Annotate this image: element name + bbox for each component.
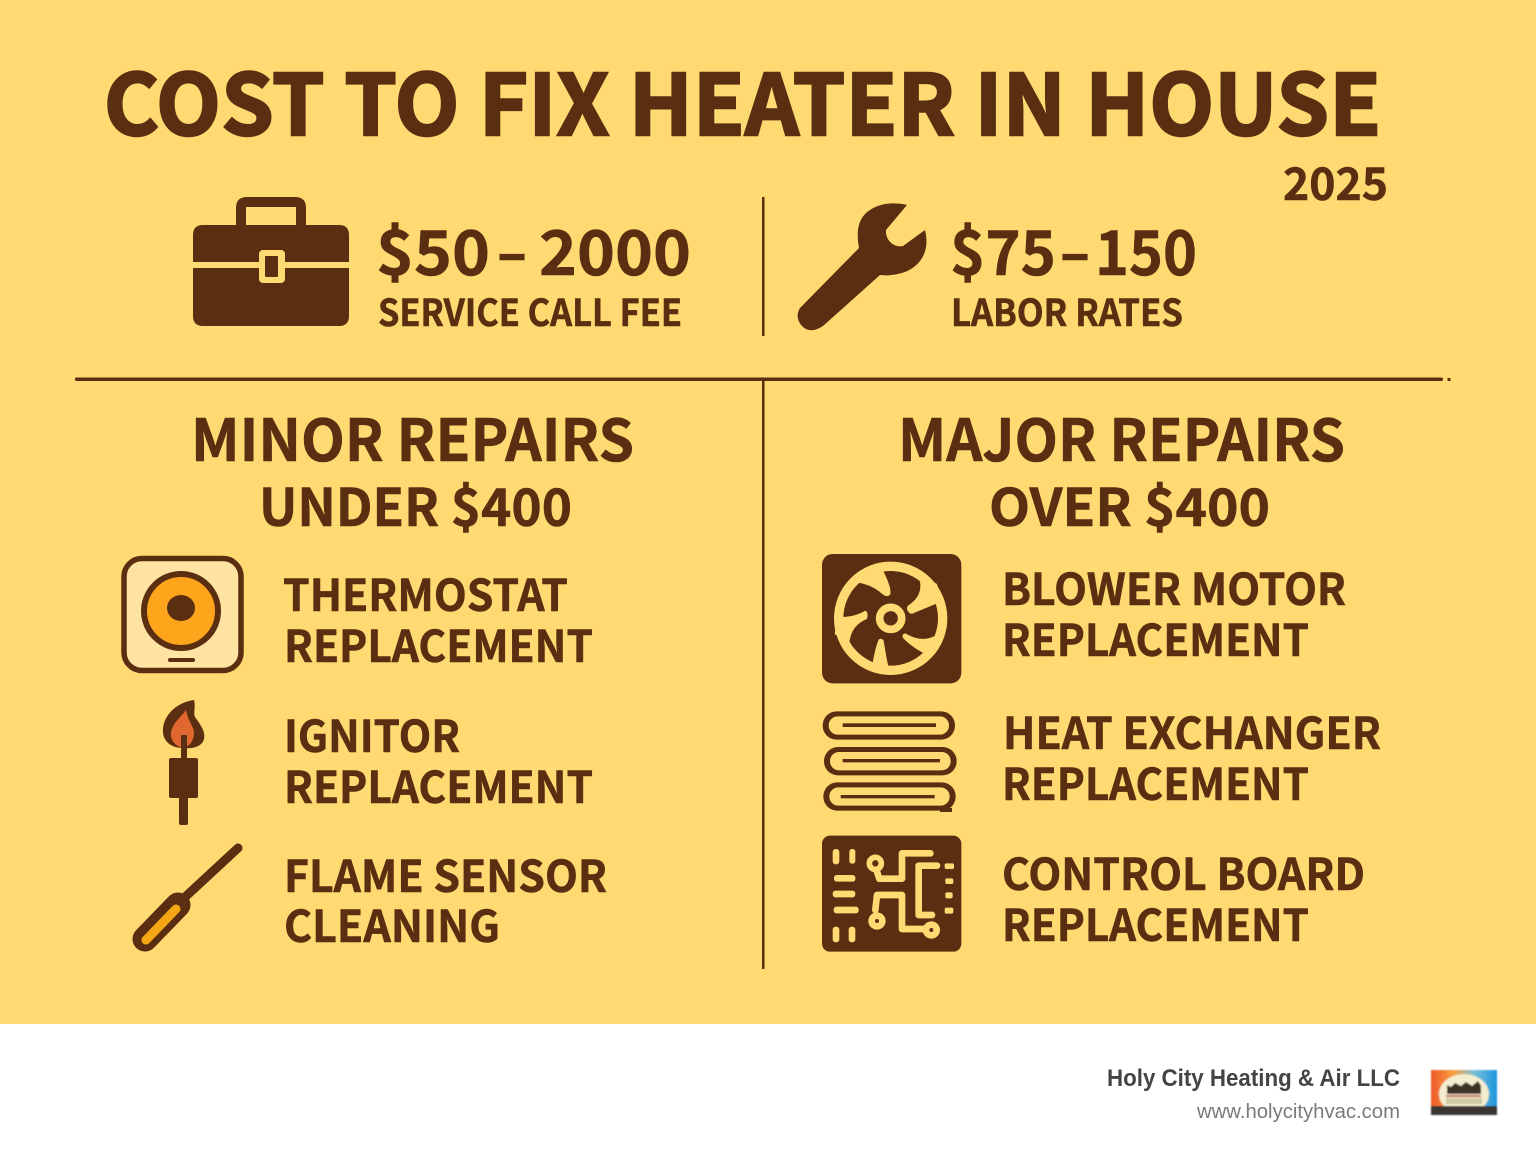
labor label: LABOR RATES	[951, 283, 1183, 337]
major repairs threshold: OVER $400	[989, 466, 1270, 541]
ignitor replacement label: REPLACEMENT	[284, 752, 593, 816]
icon: blower fan	[822, 554, 961, 683]
panel: labor rates	[798, 203, 1197, 337]
icon: ignitor	[163, 700, 204, 825]
icon: company logo	[1431, 1070, 1497, 1115]
service call price: 2000	[539, 203, 691, 293]
board replacement label: REPLACEMENT	[1002, 890, 1309, 954]
blower replacement label: REPLACEMENT	[1002, 605, 1309, 669]
footer company name: Holy City Heating & Air LLC	[1107, 1065, 1400, 1092]
title: COST TO FIX HEATER IN HOUSE	[104, 39, 1381, 160]
service call price: –	[497, 203, 527, 293]
heat exchanger label: HEAT EXCHANGER	[1003, 698, 1381, 762]
flame sensor label: FLAME SENSOR	[284, 841, 607, 905]
icon: thermostat	[124, 558, 241, 670]
panel: minor repairs	[124, 394, 634, 955]
icon: flame sensor	[145, 848, 238, 940]
minor repairs threshold: UNDER $400	[259, 466, 572, 541]
exchanger replacement label: REPLACEMENT	[1002, 749, 1309, 813]
major repairs heading: MAJOR REPAIRS	[898, 394, 1345, 478]
blower motor label: BLOWER MOTOR	[1002, 554, 1346, 618]
panel: major repairs	[822, 394, 1381, 954]
thermostat replacement label: REPLACEMENT	[284, 611, 593, 675]
control board label: CONTROL BOARD	[1002, 839, 1365, 903]
cleaning label: CLEANING	[284, 891, 500, 955]
service call label: SERVICE CALL FEE	[378, 283, 682, 337]
labor price: 150	[1095, 203, 1197, 293]
thermostat label: THERMOSTAT	[283, 560, 568, 624]
icon: wrench	[798, 203, 926, 330]
year: 2025	[1283, 148, 1388, 213]
minor repairs heading: MINOR REPAIRS	[191, 394, 634, 478]
labor price: $75	[950, 203, 1056, 293]
ignitor label: IGNITOR	[284, 701, 460, 765]
footer: white band	[0, 1024, 1536, 1154]
service call price	[376, 203, 691, 293]
icon: control board	[822, 836, 961, 952]
labor price	[950, 203, 1197, 293]
panel: service call fee	[193, 197, 691, 337]
service call price: $50	[376, 203, 490, 293]
icon: toolbox	[193, 197, 349, 326]
labor price: –	[1060, 203, 1090, 293]
icon: heat exchanger	[823, 711, 957, 812]
footer website: www.holycityhvac.com	[1196, 1101, 1400, 1123]
